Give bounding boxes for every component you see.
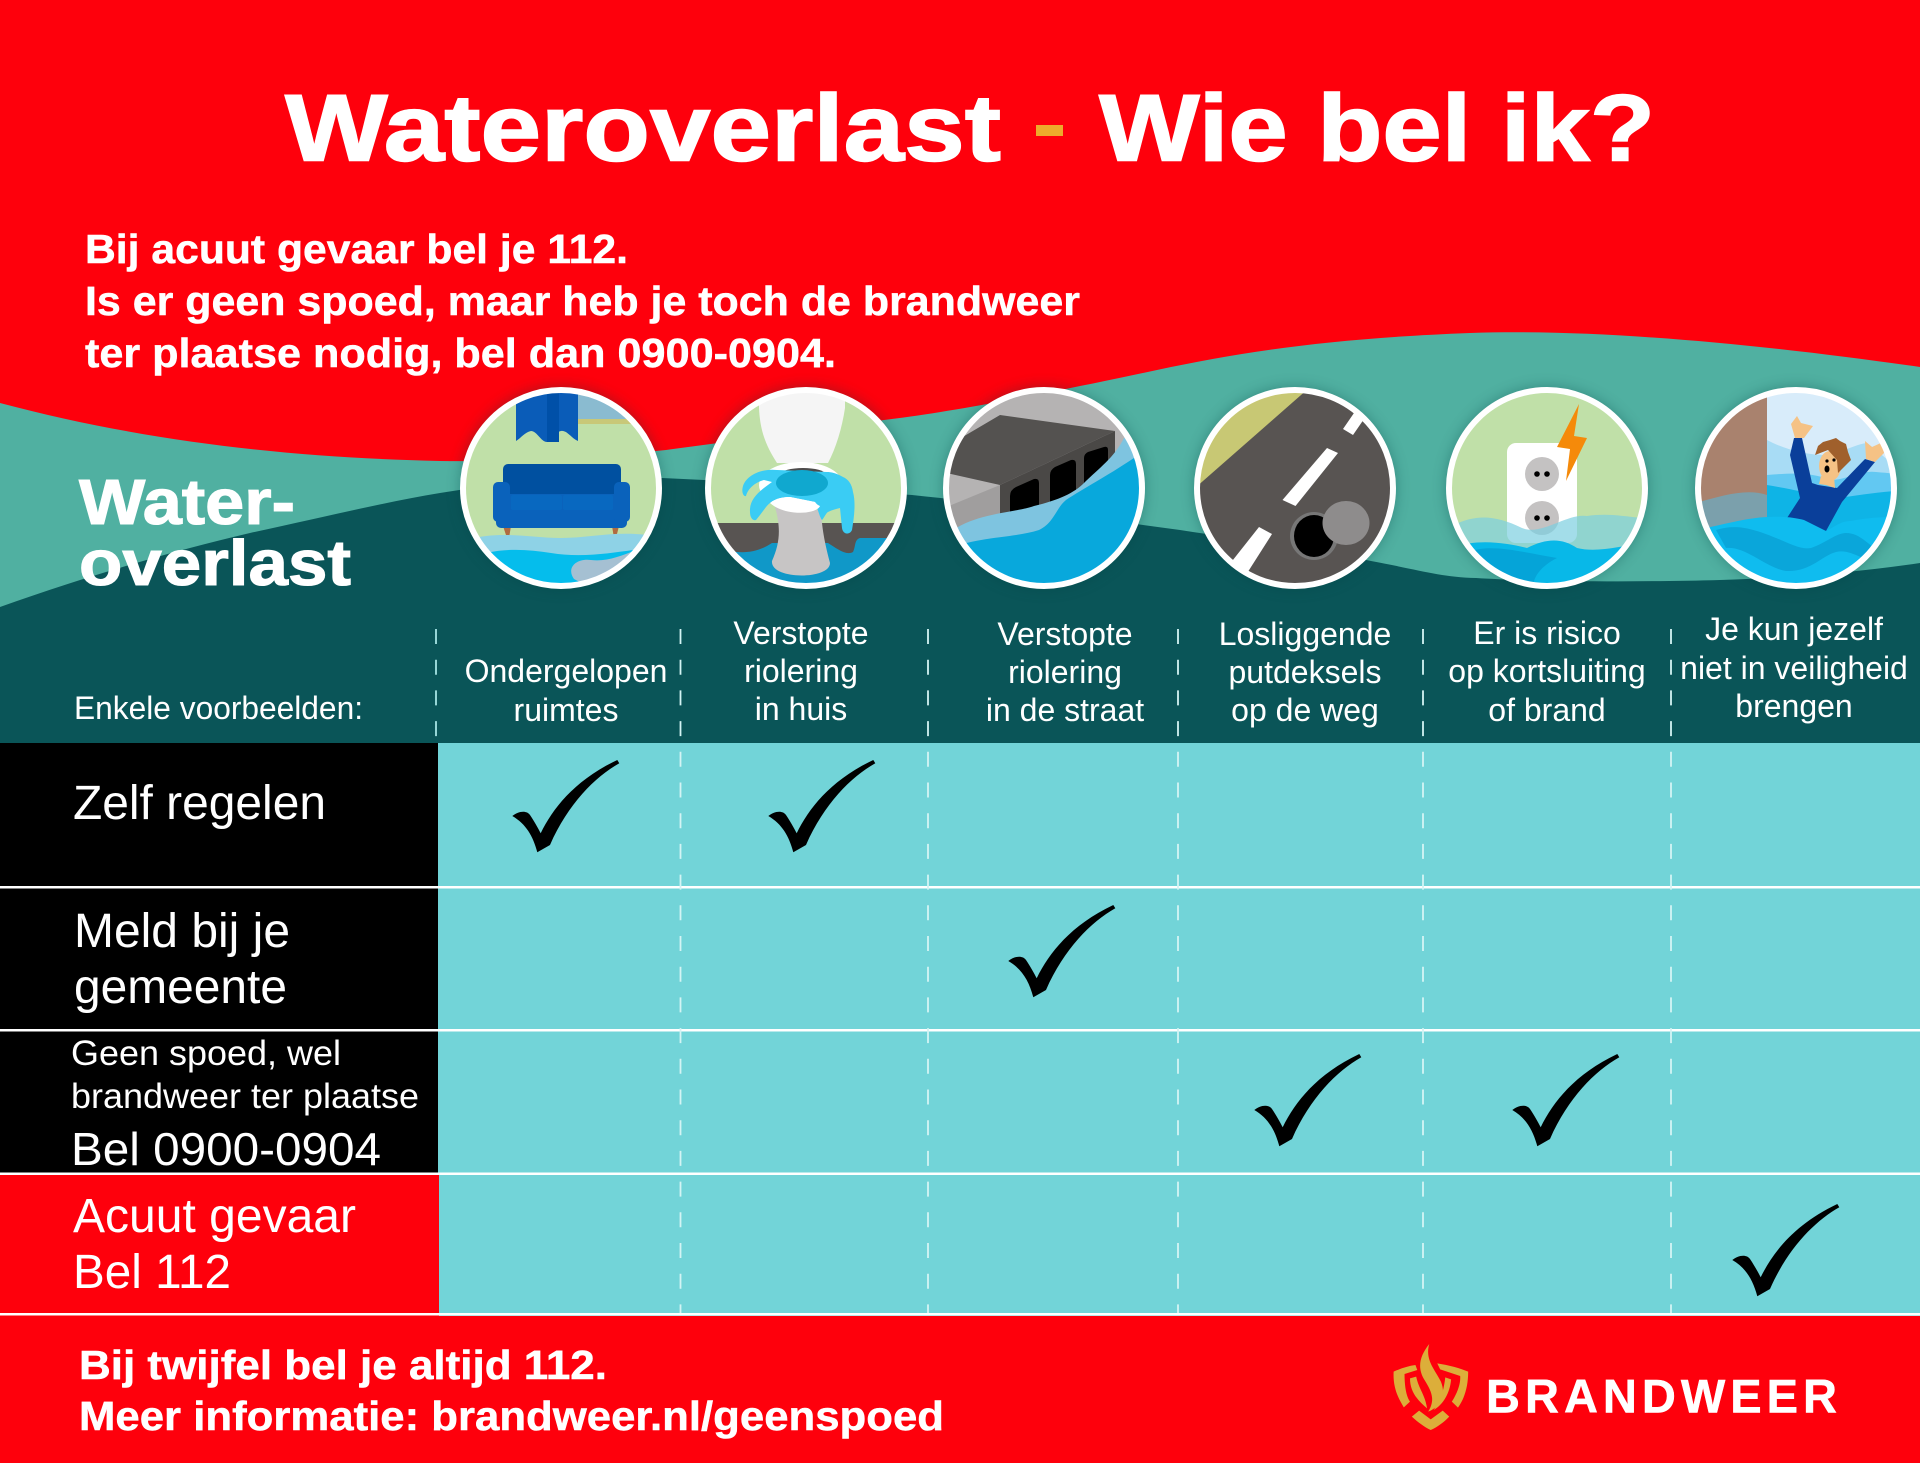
icon: person in water [1695, 387, 1897, 589]
row label: Geen spoed [71, 1034, 419, 1175]
column header: blocked sewer in street [986, 616, 1144, 728]
icon: blocked sewer in street [943, 387, 1145, 589]
row label: Acuut gevaar: Bel 112 [73, 1246, 231, 1299]
logo wordmark: BRANDWEER [1486, 1370, 1842, 1422]
row label: Geen spoed: Bel 0900-0904 [71, 1123, 381, 1175]
teal wave background [0, 0, 1920, 745]
section heading: Water-overlast: overlast [79, 527, 351, 599]
column header: cannot reach safety [1680, 611, 1908, 724]
section heading: Water-overlast: Water- [79, 466, 295, 538]
column header: blocked sewer in street: riolering [1008, 654, 1122, 690]
column header: loose manhole covers: op de weg [1231, 692, 1379, 728]
check: row 4 column 6 [1732, 1204, 1839, 1296]
row label: Zelf regelen: Zelf regelen [73, 777, 326, 830]
icon: flooded room [460, 387, 662, 589]
column header: loose manhole covers [1219, 616, 1391, 728]
check: row 1 column 1 [512, 760, 619, 852]
table grid [0, 629, 1920, 1316]
column header: flooded rooms: Ondergelopen [465, 653, 667, 689]
check: row 3 column 4 [1254, 1054, 1361, 1146]
column header: short circuit risk: op kortsluiting [1448, 653, 1646, 689]
column header: blocked sewer in house: in huis [755, 691, 847, 727]
section heading: Water-overlast [79, 466, 351, 599]
footer text [79, 1342, 944, 1439]
intro text: Bij acuut gevaar bel je 112. [85, 226, 628, 272]
column header: flooded rooms: ruimtes [514, 692, 618, 728]
intro text: Is er geen spoed, maar heb je toch de brandweer [85, 278, 1080, 324]
row label: Meld bij je gemeente: Meld bij je [74, 905, 290, 958]
check: row 1 column 2 [768, 760, 875, 852]
row label: Meld bij je gemeente [74, 905, 290, 1014]
check: row 3 column 5 [1512, 1054, 1619, 1146]
icon: brandweer logo shield [1394, 1344, 1468, 1430]
column header: cannot reach safety: brengen [1735, 688, 1853, 724]
row label: Acuut gevaar [73, 1190, 356, 1299]
column header: flooded rooms [465, 653, 667, 728]
row label: Meld bij je gemeente: gemeente [74, 961, 287, 1014]
column header: short circuit risk: of brand [1488, 692, 1606, 728]
title: Wie bel ik? [1099, 76, 1655, 182]
column header: cannot reach safety: Je kun jezelf [1705, 611, 1883, 647]
title: Wateroverlast [285, 76, 1001, 182]
title [285, 76, 1655, 182]
footer text: Bij twijfel bel je altijd 112. [79, 1342, 607, 1388]
column header: cannot reach safety: niet in veiligheid [1680, 650, 1908, 686]
footer band [0, 1316, 1920, 1463]
column header: loose manhole covers: Losliggende [1219, 616, 1391, 652]
icon: blocked sewer in house [705, 387, 907, 589]
check: row 2 column 3 [1008, 905, 1115, 997]
column header: blocked sewer in house [733, 615, 869, 727]
column header: short circuit risk [1448, 615, 1646, 728]
column header: blocked sewer in street: in de straat [986, 692, 1144, 728]
row label: Geen spoed: Geen spoed, wel [71, 1034, 341, 1073]
column header: row label intro: Enkele voorbeelden: [74, 690, 363, 726]
intro text [85, 226, 1080, 376]
column header: blocked sewer in house: Verstopte [733, 615, 869, 651]
dark teal wave [0, 477, 1920, 745]
row label: Geen spoed: brandweer ter plaatse [71, 1077, 419, 1116]
footer text: Meer informatie: brandweer.nl/geenspoed [79, 1393, 944, 1439]
intro text: ter plaatse nodig, bel dan 0900-0904. [85, 330, 836, 376]
row label: Acuut gevaar: Acuut gevaar [73, 1190, 356, 1243]
column header: loose manhole covers: putdeksels [1229, 654, 1381, 690]
icon: socket with short circuit [1446, 387, 1648, 589]
red header wave [0, 0, 1920, 461]
column header: blocked sewer in street: Verstopte [997, 616, 1133, 652]
icon: loose manhole cover [1194, 387, 1396, 589]
column header: blocked sewer in house: riolering [744, 653, 858, 689]
column header: short circuit risk: Er is risico [1473, 615, 1621, 651]
